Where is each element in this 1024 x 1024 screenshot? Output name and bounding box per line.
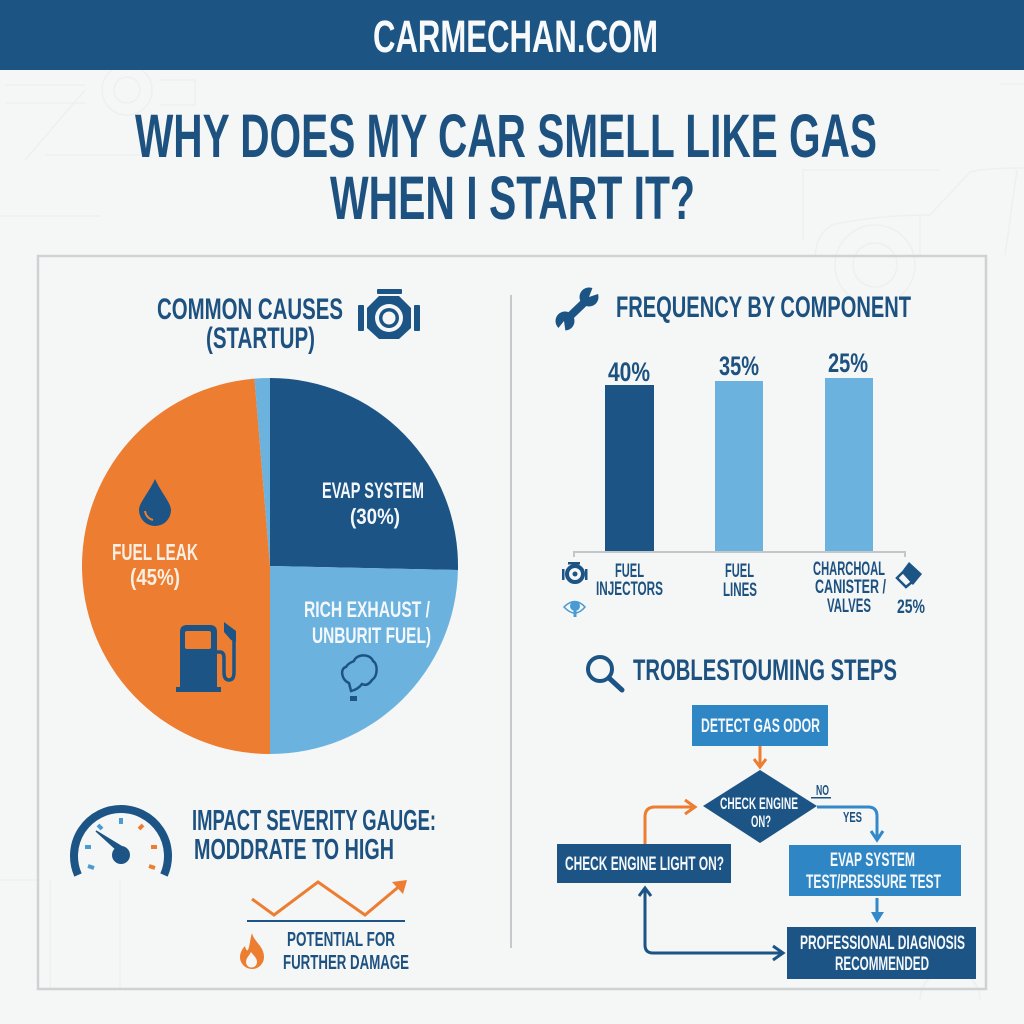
- pie label: evap system: EVAP SYSTEM: [322, 478, 424, 503]
- pie label: fuel leak: [112, 539, 198, 590]
- step: detect gas odor: [692, 705, 828, 746]
- bar labels: 25%: [897, 597, 925, 618]
- decision: check engine on: ON?: [751, 812, 771, 831]
- step: evap test: [789, 845, 961, 896]
- bar values: [608, 348, 868, 387]
- pie label: fuel leak: (45%): [130, 564, 180, 590]
- title: [135, 102, 877, 232]
- bar labels: INJECTORS: [596, 579, 663, 600]
- step: evap test: EVAP SYSTEM: [830, 850, 915, 871]
- decision: check engine on: CHECK ENGINE: [720, 794, 798, 813]
- icon: flame: [240, 933, 264, 969]
- label: no: [811, 782, 831, 799]
- bar labels: FUEL: [725, 561, 754, 582]
- pie chart: common causes: [82, 378, 458, 754]
- text: potential further damage: POTENTIAL FOR: [287, 929, 395, 951]
- step: professional diagnosis: RECOMMENDED: [835, 954, 929, 975]
- pie label: rich exhaust: [304, 597, 431, 648]
- heading: impact severity: IMPACT SEVERITY GAUGE:: [192, 805, 436, 837]
- text: potential further damage: [283, 929, 409, 974]
- text: potential further damage: FURTHER DAMAGE: [283, 952, 409, 974]
- main panel frame: [38, 256, 986, 989]
- bar values: 35%: [719, 351, 759, 381]
- arrow: odor to decision: [754, 746, 766, 767]
- pie label: rich exhaust: RICH EXHAUST /: [304, 597, 430, 622]
- bar labels: FUEL: [615, 561, 644, 582]
- heading: common causes: [157, 293, 343, 355]
- bar labels: CANISTER /: [815, 577, 886, 598]
- bar labels: CHARCHOAL: [813, 559, 885, 580]
- heading: troubleshooting: TROBLESTOUMING STEPS: [633, 654, 897, 687]
- decision: check engine on: [703, 770, 817, 843]
- arrow: diagnosis to light: [639, 888, 783, 960]
- gauge: [74, 809, 168, 875]
- icon: wrench: [556, 284, 604, 335]
- label: no: NO: [816, 782, 829, 799]
- pie label: fuel leak: FUEL LEAK: [112, 539, 198, 565]
- step: detect gas odor: DETECT GAS ODOR: [701, 716, 820, 737]
- bar values: 40%: [608, 357, 650, 387]
- heading: impact severity: [192, 805, 436, 866]
- icon: engine: [358, 289, 420, 339]
- heading: impact severity: MODDRATE TO HIGH: [194, 834, 394, 866]
- pie label: evap system: [322, 478, 424, 529]
- step: professional diagnosis: [787, 927, 976, 979]
- icon: magnifier: [588, 657, 622, 690]
- header band: CARMECHAN.COM: [373, 11, 658, 62]
- bar labels: VALVES: [827, 596, 871, 617]
- icon: fuel drop: [139, 479, 171, 526]
- icon: canister: [897, 562, 922, 587]
- bar chart: [574, 348, 925, 618]
- arrow: evap to diagnosis: [871, 898, 884, 923]
- step: check engine light: CHECK ENGINE LIGHT ON?: [565, 854, 724, 875]
- heading: common causes: COMMON CAUSES: [157, 293, 343, 326]
- heading: common causes: (STARTUP): [206, 322, 315, 355]
- step: check engine light: [557, 844, 731, 883]
- step: evap test: TEST/PRESSURE TEST: [806, 872, 941, 893]
- icon: fuel pump: [176, 622, 236, 692]
- bar values: 25%: [828, 348, 868, 378]
- pie label: evap system: (30%): [350, 504, 400, 529]
- icon: smoke cloud: [342, 655, 377, 701]
- arrow: yes to evap: [817, 807, 883, 840]
- arrow: light to decision: [645, 800, 695, 844]
- trend line: [247, 880, 407, 922]
- icon: small engine: [562, 562, 588, 582]
- bar labels: LINES: [723, 580, 757, 601]
- pie label: rich exhaust: UNBURIT FUEL): [312, 623, 431, 648]
- header band: [0, 0, 1024, 70]
- title: WHEN I START IT?: [330, 164, 695, 232]
- label: yes: YES: [843, 809, 862, 826]
- flowchart: [557, 705, 976, 979]
- icon: injector: [564, 601, 585, 617]
- bar labels: [596, 559, 925, 618]
